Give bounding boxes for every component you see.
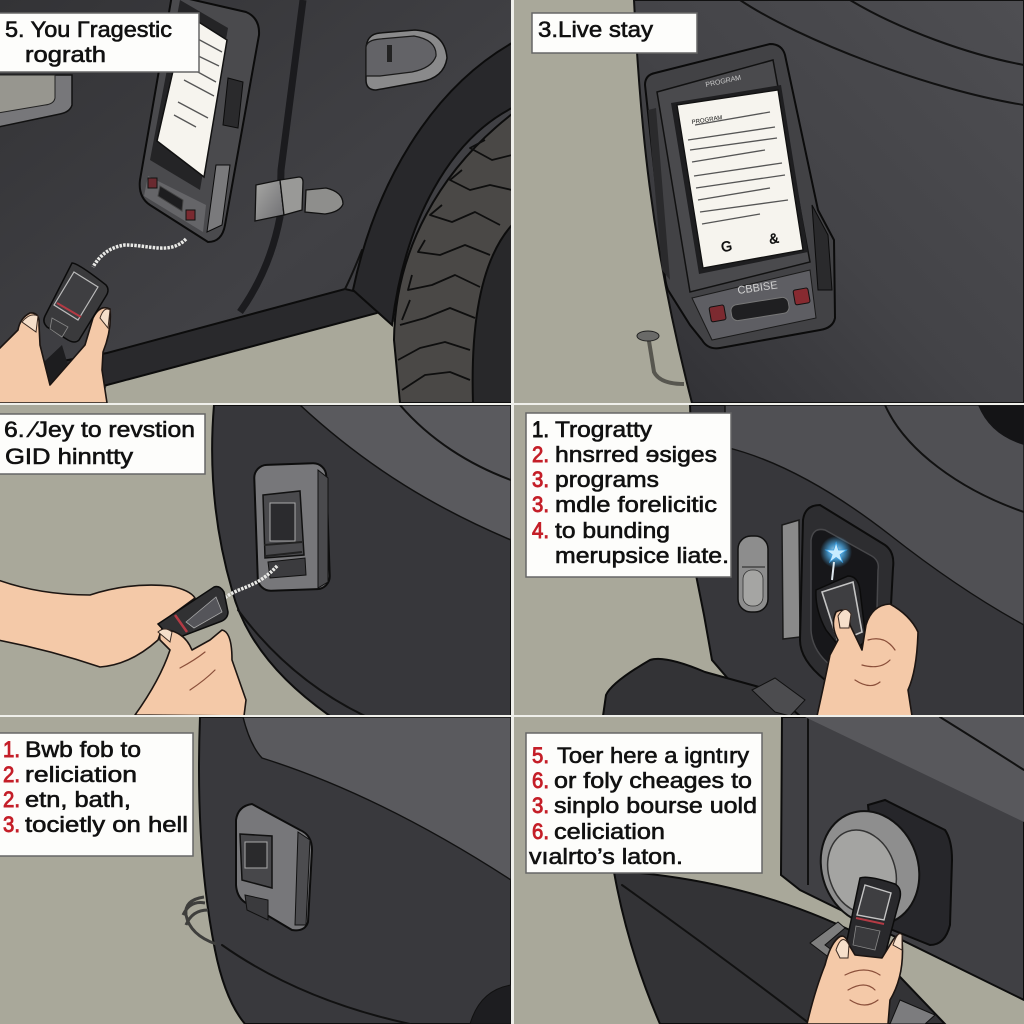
upper body highlight — [243, 717, 511, 880]
step list: 2. — [3, 787, 20, 812]
ground — [100, 313, 400, 403]
step list — [526, 733, 762, 873]
step label: 5. You Γragestic — [5, 17, 172, 42]
scan tool device — [645, 44, 835, 348]
scan tool cable — [93, 239, 186, 267]
step list: 6. — [532, 819, 549, 844]
door handle pod — [738, 536, 768, 612]
step list: celiciation — [554, 819, 665, 844]
scan tool device: PROGRAM — [691, 115, 723, 126]
rocker panel — [66, 288, 378, 386]
step label: GID hinntty — [5, 444, 133, 469]
step list: vıalrto’s laton. — [529, 844, 683, 869]
step list: programs — [555, 467, 659, 492]
hand with key fob — [807, 877, 902, 1024]
step list: Trogratty — [555, 417, 652, 442]
latch strip — [782, 520, 800, 639]
door latch — [255, 177, 343, 221]
step label: 6. ⁄Jey to revstion — [4, 417, 195, 442]
step list: tocietly on hell — [25, 812, 188, 837]
step label — [0, 414, 205, 474]
door seam — [240, 0, 303, 312]
body control module — [236, 804, 312, 930]
door handle — [366, 30, 447, 90]
step label — [532, 13, 697, 53]
step list — [0, 733, 193, 856]
scan tool device — [140, 0, 259, 242]
scan tool device: G — [720, 237, 733, 255]
step list: Toer here a igntıry — [557, 743, 749, 768]
wall background — [514, 717, 1024, 1024]
step list: 1. — [532, 417, 549, 442]
glow star — [820, 536, 852, 580]
ignition housing — [800, 505, 893, 680]
step label: rograth — [25, 42, 106, 67]
wall background — [0, 717, 511, 1024]
wall background — [514, 405, 725, 715]
step list: 6. — [532, 768, 549, 793]
wall background — [0, 405, 327, 715]
upper car body — [781, 717, 1024, 1000]
panel: step top-left, scan tool and fob at car door — [0, 0, 512, 403]
step list: Bwb fob to — [25, 737, 141, 762]
tyre — [394, 114, 512, 403]
panel: step middle-right, fob to ignition slot — [514, 405, 1024, 716]
car body — [212, 405, 511, 716]
key fob — [816, 576, 866, 650]
scan tool device: CBBISE — [737, 279, 778, 297]
window frame — [0, 75, 72, 127]
step label — [0, 13, 199, 72]
step list: 1. — [3, 737, 20, 762]
key fob — [44, 263, 108, 342]
step list: or foly cheages to — [554, 768, 752, 793]
wheel arch — [353, 43, 512, 325]
step label: 3.Live stay — [538, 17, 653, 42]
step list — [526, 413, 731, 577]
step list: 3. — [532, 492, 549, 517]
step list: etn, bath, — [25, 787, 131, 812]
step list: 3. — [532, 467, 549, 492]
panel: step middle-left, fob linked to body module — [0, 405, 511, 716]
step list: merupsice liate. — [555, 543, 729, 568]
step list: 4. — [532, 518, 549, 543]
upper body highlight — [300, 405, 511, 540]
control bar — [692, 270, 816, 340]
key fob — [158, 587, 228, 638]
panel: step bottom-left, module on lower body — [0, 717, 511, 1024]
fob cable — [222, 565, 278, 600]
hand holding key fob — [0, 263, 110, 403]
upper body highlight — [725, 405, 1024, 625]
hand with key fob — [816, 576, 918, 716]
scan tool device: & — [768, 229, 780, 247]
car body — [634, 0, 1024, 403]
step list: to bunding — [555, 518, 670, 543]
bumper step — [603, 659, 800, 716]
step list: 5. — [532, 743, 549, 768]
scan tool device: PROGRAM — [705, 75, 742, 89]
wall background — [514, 0, 691, 403]
step list: sinplo bourse uold — [554, 793, 757, 818]
ignition disc assembly — [805, 797, 952, 945]
step list: 3. — [532, 793, 549, 818]
body control module — [254, 463, 330, 591]
cable hook — [648, 335, 684, 384]
glow star: ★ — [824, 538, 848, 568]
step list: hnsrred ɘsiges — [555, 442, 717, 467]
car body — [690, 405, 1024, 716]
step list: 2. — [532, 442, 549, 467]
arm and hand with key fob — [0, 580, 246, 716]
key fob — [847, 877, 900, 959]
panel: step bottom-right, fob at ignition disc — [514, 717, 1024, 1024]
step list: reliciation — [25, 762, 137, 787]
panel: step top-right, scan tool screen close-up — [514, 0, 1024, 403]
step list: 2. — [3, 762, 20, 787]
cable coil — [183, 897, 216, 944]
car door body — [0, 0, 511, 403]
step list: mdle forelicitic — [555, 492, 717, 517]
step list: 3. — [3, 812, 20, 837]
car body — [199, 717, 511, 1024]
lower bumper — [614, 872, 945, 1024]
bracket — [810, 922, 845, 962]
